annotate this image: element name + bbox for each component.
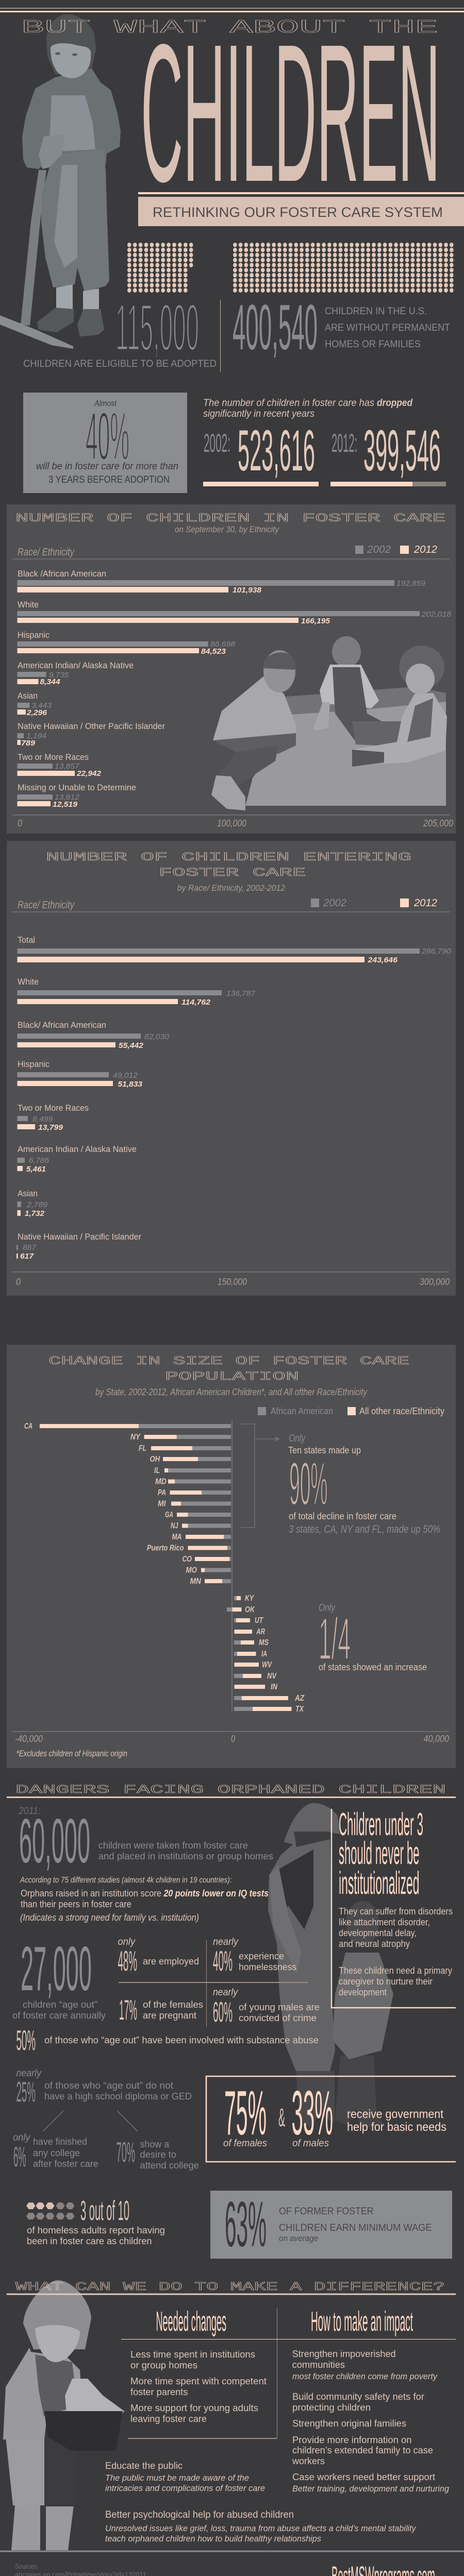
axis labels [15,1734,449,1744]
stat: 25 percent no diploma: of those who “age out” do not [44,2080,173,2091]
stat: 60,000 placed in institutions: and placed in institutions or group homes [98,1851,273,1861]
heading: POPULATION [165,1370,299,1383]
stat: 25 percent no diploma: nearly [16,2068,42,2079]
row: White: White [18,977,39,987]
diverging bar chart: states with increases: OK [245,1605,255,1614]
diverging bar chart: states with declines: IL [154,1466,160,1475]
row: Hispanic [18,1059,143,1089]
diverging bar chart: states with increases: AR [256,1628,265,1636]
row: Two or more: 13,857 [55,762,80,771]
row: Total: 286,790 [421,947,452,956]
legend [258,1406,444,1416]
text: IQ study [20,1876,269,1923]
stat: 2012 count: 2012: [332,429,357,457]
stat: 6 percent college: any college [33,2148,80,2158]
axis labels: 0 [18,818,22,828]
callout: ten states 90 percent: Ten states made up [288,1445,361,1455]
diverging bar chart: states with declines: Puerto Rico [147,1544,184,1553]
diverging bar chart: states with declines: PA [158,1488,166,1497]
callout: one quarter of states: Only [319,1602,336,1614]
stat: 60 percent convicted: convicted of crime [239,2013,317,2023]
stat: 60 percent convicted: of young males are [239,2002,320,2012]
stat: 6 percent college: have finished [33,2137,87,2147]
axis labels [16,1277,450,1287]
column: needed changes: More time spent with competent [130,2376,267,2386]
text: better psychological help: Better psychological help for abused children [105,2510,294,2520]
column: how to make an impact: Provide more information on [292,2435,411,2445]
stat: 2002 count [203,418,319,486]
diverging bar chart: states with declines: OH [150,1455,160,1464]
text: IQ study: than their peers in foster care [21,1899,131,1909]
stat: 2002 count: 2002: [204,429,230,457]
diverging bar chart: states with increases: IN [271,1683,277,1691]
panel: 40 percent callout: Almost [94,399,117,408]
column: needed changes [130,2306,267,2424]
column: needed changes: More support for young adults [130,2403,258,2413]
text: better psychological help: teach orphaned children how to build healthy relationships [105,2534,321,2544]
callout: one quarter of states: of states showed an increase [319,1662,427,1672]
dot grid: 115 children [127,243,195,293]
row: Missing: Missing or Unable to Determine [18,783,136,792]
row: American Indian [18,660,134,686]
legend: Race/ Ethnicity [18,900,75,911]
heading: what can we do: WHAT CAN WE DO TO MAKE A DIFFERENCE? [15,2280,445,2294]
callout: children under 3: These children need a primary [339,1965,452,1976]
row: Total: Total [18,935,35,945]
legend: 2002 [323,897,346,909]
row: Two or more [18,1103,89,1132]
stat: 3 out of 10 homeless adults [26,2195,165,2246]
text: educate the public: The public must be made aware of the [105,2473,249,2483]
legend: All other race/Ethnicity [359,1406,444,1416]
stat: 27,000 age out [12,1934,106,2021]
stat: 50 percent substance abuse: 50% [16,2024,36,2056]
legend: African American [271,1406,333,1416]
stat: 25 percent no diploma: have a high school diploma or GED [44,2091,192,2102]
legend: Race/ Ethnicity [18,547,75,558]
callout: children under 3: development [339,1987,387,1997]
stat: 48 percent employed: only [118,1937,136,1947]
callout: government help: of males [292,2138,329,2149]
diverging bar chart: states with declines [24,1422,231,1586]
row: White: 202,018 [421,610,452,619]
row: Hispanic: 86,698 [210,640,236,649]
row: Black: Black /African American [18,569,106,579]
diverging bar chart: states with declines: NJ [171,1522,178,1530]
photo: woman and child background [268,1803,393,2128]
stat: 48 percent employed: are employed [143,1956,199,1967]
stat: 17 percent pregnant [119,1994,203,2026]
row: Missing [18,783,136,809]
row: Hispanic: 51,833 [118,1080,143,1089]
callout: ten states 90 percent: of total decline in foster care [289,1511,396,1521]
row: Hispanic: Hispanic [18,630,49,640]
stat: 60,000 placed in institutions: 2011: [18,1806,41,1817]
diverging bar chart: states with increases: AZ [294,1694,305,1703]
stat: 115,000: CHILDREN ARE ELIGIBLE TO BE ADOPTED [23,359,217,369]
axis labels [18,818,453,828]
text: educate the public [105,2461,265,2493]
row: Native Hawaiian: 789 [21,739,36,748]
diverging bar chart: states with increases: NV [267,1672,277,1681]
photo: child holding basket [3,2280,124,2550]
text: 27,000 [21,1934,92,2004]
stat: 70 percent desire college: attend college [140,2160,199,2171]
row: Total: 243,646 [367,956,398,964]
stat: 40 percent homelessness: 40% [213,1945,233,1977]
row: Two or more [18,752,102,778]
stat: 115,000 [23,291,217,369]
text: IQ study: (Indicates a strong need for family vs. institution) [20,1912,199,1923]
callout: ten states 90 percent: Only [289,1433,306,1444]
row: Black: 192,859 [396,579,426,588]
axis labels: 0 [16,1277,21,1287]
row: American Indian: 8,344 [40,677,60,686]
column: how to make an impact: Strengthen original families [292,2418,406,2429]
axis labels: -40,000 [15,1734,43,1744]
panel: 63 percent minimum wage: 63% [225,2189,267,2260]
subheading: by Race/ Ethnicity, 2002-2012 [177,883,285,893]
stat: 2012 count [330,418,446,486]
stat: 60,000 placed in institutions: children were taken from foster care [98,1840,248,1851]
callout: one quarter of states: 1/4 [319,1606,351,1672]
row: American Indian: 6,786 [29,1156,49,1165]
subtitle banner: RETHINKING OUR FOSTER CARE SYSTEM [153,205,443,220]
subtitle banner [138,197,464,226]
callout: ten states 90 percent: 90% [289,1450,328,1518]
axis labels: 40,000 [424,1734,449,1744]
row: Black [18,1020,170,1050]
callout: children under 3: They can suffer from disorders [339,1906,453,1917]
legend [18,897,437,911]
text: decline statement [203,398,412,419]
row: Hispanic: Hispanic [18,1059,49,1069]
callout: government help: help for basic needs [347,2120,446,2133]
text: 115,000 [115,291,199,365]
callout: children under 3 [332,1807,456,2008]
column: how to make an impact: protecting children [292,2402,371,2413]
text: educate the public: Educate the public [105,2461,183,2471]
stat: 70 percent desire college: show a [140,2139,170,2149]
diverging bar chart: states with increases: IA [261,1650,267,1658]
panel: 40 percent callout: 40% [86,398,129,474]
axis labels: 100,000 [217,818,246,828]
bar chart: entering care [16,935,452,1261]
heading: NUMBER OF CHILDREN ENTERING [46,851,411,864]
diverging bar chart: states with declines: CO [183,1555,192,1564]
column: how to make an impact: Case workers need better support [292,2472,435,2482]
stat: 17 percent pregnant: of the females [143,1999,203,2010]
axis labels: 0 [231,1734,235,1744]
heading: NUMBER OF CHILDREN IN FOSTER CARE [15,512,445,525]
column: how to make an impact: Build community safety nets for [292,2392,424,2402]
heading: CHANGE IN SIZE OF FOSTER CARE [48,1354,409,1368]
row: Native Hawaiian [16,1232,141,1261]
row: Asian: Asian [18,1189,38,1198]
dot grid: 400 children [233,243,455,293]
column: needed changes: leaving foster care [130,2414,207,2424]
row: Missing: 12,519 [53,800,78,809]
sources [15,2562,294,2576]
panel: 63 percent minimum wage [210,2189,452,2260]
photo: boy with pickaxe [0,14,121,349]
row: Black: 101,938 [233,586,262,595]
stat: 40 percent homelessness [213,1937,296,1977]
row: Two or more: 22,942 [76,769,102,778]
stat: 6 percent college: after foster care [33,2159,98,2169]
diverging bar chart: states with declines: GA [165,1511,173,1519]
bracket with arrow [240,1424,280,1528]
diverging bar chart: states with declines: NY [130,1433,141,1442]
row: American Indian: American Indian/ Alaska Native [18,660,134,670]
row: Native Hawaiian: 887 [23,1243,37,1252]
legend: 2012 [413,897,437,909]
column: how to make an impact: communities [292,2360,345,2370]
stat: 3 out of 10 homeless adults: been in foster care as children [27,2236,152,2246]
stat: 60 percent convicted: nearly [213,1987,238,1998]
row: Asian [18,1189,48,1218]
stat: 40 percent homelessness: experience [239,1951,284,1961]
row: Native Hawaiian: 1,194 [26,732,46,740]
axis labels: 205,000 [423,818,453,828]
subheading: by State, 2002-2012, African American Children*, and All ofther Race/Ethnicity [95,1387,368,1397]
stat: 400,540: CHILDREN IN THE U.S. [325,306,427,317]
diverging bar chart: states with increases: WV [262,1660,272,1669]
callout: government help: & [278,2103,285,2132]
row: Two or more: 13,799 [38,1123,63,1132]
stat: 50 percent substance abuse: of those who “age out” have been involved with substance abuse [44,2035,319,2045]
diverging bar chart: states with declines: MN [190,1577,201,1586]
row: Hispanic: 84,523 [201,647,226,656]
panel: 40 percent callout: will be in foster care for more than [36,461,178,472]
text: better psychological help: Unresolved issues like grief, loss, trauma from abuse affects a child’s mental stability [105,2523,417,2533]
panel: change in size of foster care population [7,1345,456,1768]
stat: 40 percent homelessness: homelessness [239,1962,296,1972]
stat: 70 percent desire college [117,2136,199,2171]
row: American Indian: 5,461 [26,1165,46,1174]
bar chart: ethnicity [18,569,452,809]
column: how to make an impact: Strengthen impoverished [292,2349,396,2359]
stat: 400,540: 400,540 [233,292,318,363]
row: White: 136,787 [226,989,256,998]
callout: government help: 33% [292,2078,333,2148]
stat: 50 percent substance abuse [16,2024,319,2056]
stat: 6 percent college [13,2132,98,2173]
stat: 400,540: HOMES OR FAMILIES [325,339,421,350]
column: needed changes: Needed changes [156,2306,226,2337]
text: decline statement: dropped [377,398,412,409]
legend [18,544,437,558]
row: Asian [18,691,52,717]
stat: 60,000 placed in institutions: 60,000 [19,1806,90,1876]
row: Hispanic [18,630,236,656]
stat: 70 percent desire college: 70% [117,2136,135,2168]
panel: number of children in foster care [7,504,456,834]
diverging bar chart: states with increases: MS [259,1638,269,1647]
panel: 63 percent minimum wage: CHILDREN EARN MINIMUM WAGE [279,2223,432,2233]
panel: 63 percent minimum wage: OF FORMER FOSTER [279,2206,373,2217]
stat: 25 percent no diploma: 25% [16,2076,36,2108]
row: Black [18,569,426,595]
subheading: on September 30, by Ethnicity [175,524,279,534]
heading [48,1354,409,1383]
column: how to make an impact: Better training, development and nurturing [292,2484,450,2494]
text: educate the public: intricacies and complications of foster care [105,2483,265,2493]
row: Native Hawaiian: 617 [20,1252,34,1261]
panel: 63 percent minimum wage: on average [279,2233,318,2243]
callout: government help: 75% [224,2078,267,2148]
stat: 27,000 age out: children “age out” [23,1999,97,2010]
row: Hispanic: 49,012 [113,1071,138,1080]
heading: FOSTER CARE [159,866,306,879]
callout: children under 3: developmental delay, [339,1928,417,1938]
stat: 6 percent college: 6% [13,2141,26,2173]
panel: 40 percent callout: 3 YEARS BEFORE ADOPTION [48,474,170,485]
diverging bar chart: states with declines: MO [186,1566,197,1574]
axis labels: 300,000 [420,1277,450,1287]
row: American Indian [18,1144,137,1174]
stat: 27,000 age out: of foster care annually [12,2010,106,2021]
stat: 60 percent convicted [213,1987,320,2028]
row: White [18,600,452,625]
stat: 48 percent employed: 48% [118,1945,137,1977]
text: IQ study: According to 75 different studies (almost 4k children in 19 countries): [20,1876,232,1885]
diverging bar chart: states with declines: CA [24,1422,32,1431]
column: how to make an impact: most foster children come from poverty [292,2371,438,2381]
legend: 2012 [413,544,437,555]
connector lines [43,2111,138,2131]
row: American Indian: American Indian / Alaska Native [18,1144,137,1154]
row: Two or more: Two or More Races [18,752,89,762]
stat: 25 percent no diploma [16,2068,192,2108]
text: IQ study: Orphans raised in an institution score [21,1888,161,1899]
text: decline statement: The number of children in foster care has [203,398,374,409]
row: Asian: 2,296 [26,708,47,717]
stat: 70 percent desire college: desire to [140,2149,176,2160]
panel: 40 percent callout [23,393,187,493]
callout: children under 3: caregiver to nurture their [339,1976,433,1987]
column: needed changes: or group homes [130,2360,197,2370]
stat: 400,540: ARE WITHOUT PERMANENT [325,323,450,333]
heading [46,851,411,879]
text: IQ study: 20 points lower on IQ tests [163,1888,269,1899]
callout: ten states 90 percent [288,1433,440,1535]
callout: government help [206,2076,456,2162]
sources: Sources: [15,2562,39,2570]
row: Native Hawaiian [18,721,165,748]
diverging bar chart: states with declines: MD [155,1478,167,1486]
row: Two or more: 8,499 [32,1115,53,1124]
row: Asian: 1,732 [25,1209,45,1218]
row: Total [18,935,452,964]
diverging bar chart: states with increases: TX [295,1705,304,1714]
heading: but what about the: BUT WHAT ABOUT THE [21,17,438,38]
diverging bar chart: states with declines: MI [158,1499,166,1509]
stat: 3 out of 10 homeless adults: of homeless adults report having [27,2225,165,2235]
column: how to make an impact: children’s extended family to case [292,2445,433,2455]
text: 523,616 [238,418,315,483]
stat: 17 percent pregnant: 17% [119,1994,137,2026]
column: how to make an impact: workers [292,2456,325,2466]
diverging bar chart: states with declines: MA [172,1533,181,1541]
diverging bar chart: states with increases: KY [245,1594,254,1603]
diverging bar chart: states with increases [227,1594,305,1714]
row: White: White [18,600,39,609]
callout: government help: receive government [347,2107,444,2121]
column: how to make an impact [292,2306,450,2494]
text: better psychological help [105,2510,417,2544]
row: Black: Black/ African American [18,1020,106,1030]
stat: 17 percent pregnant: are pregnant [143,2010,196,2021]
stat: 48 percent employed [118,1937,199,1977]
photo: three children playing [211,636,447,810]
legend: 2002 [367,544,391,555]
row: Black: 55,442 [119,1041,144,1050]
stat: 40 percent homelessness: nearly [213,1937,239,1947]
callout: children under 3: and neural atrophy [339,1939,410,1949]
heading: dangers facing orphaned children: DANGERS FACING ORPHANED CHILDREN [15,1783,446,1797]
stat: 60 percent convicted: 60% [213,1996,233,2028]
row: Asian: 2,789 [26,1200,48,1209]
text: decline statement: significantly in recent years [203,409,314,419]
row: Missing: 13,812 [55,793,80,802]
row: Asian: 3,443 [31,701,52,710]
row: White [18,977,256,1007]
column: needed changes: foster parents [130,2387,188,2397]
diverging bar chart: states with increases: UT [255,1616,263,1625]
row: White: 114,762 [181,998,211,1007]
stat: 6 percent college: only [13,2132,31,2143]
stat: 3 out of 10 homeless adults: 3 out of 10 [80,2195,129,2226]
row: Native Hawaiian: Native Hawaiian / Other Pacific Islander [18,721,165,731]
row: American Indian: 9,735 [49,671,69,680]
column: needed changes: Less time spent in institutions [130,2349,255,2360]
row: Native Hawaiian: Native Hawaiian / Pacific Islander [18,1232,141,1242]
diverging bar chart: states with declines: FL [139,1444,146,1453]
panel: number of children entering foster care [7,841,456,1296]
footnote: *Excludes children of Hispanic origin [16,1749,127,1758]
row: Black: 82,030 [144,1032,170,1041]
callout: children under 3: like attachment disorder, [339,1917,430,1927]
row: White: 166,195 [301,617,330,625]
row: Two or more: Two or More Races [18,1103,89,1113]
axis labels: 150,000 [218,1277,247,1287]
callout: government help: of females [223,2138,267,2149]
row: Asian: Asian [18,691,38,701]
